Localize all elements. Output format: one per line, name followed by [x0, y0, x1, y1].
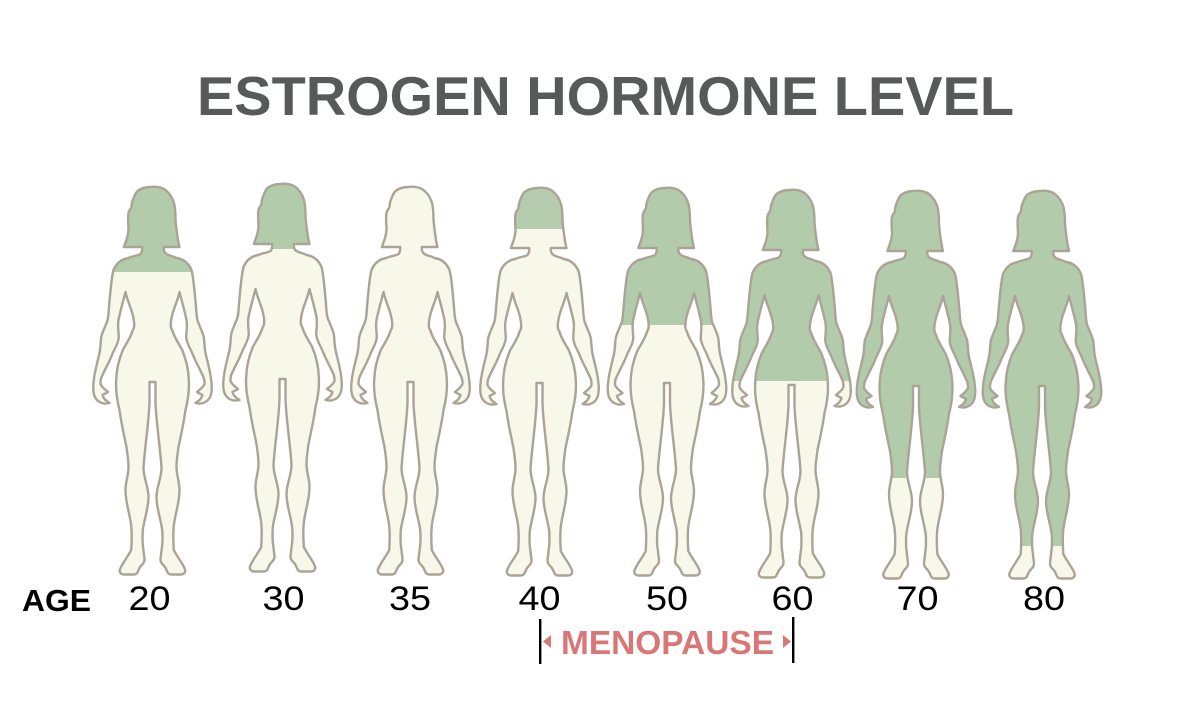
menopause bracket	[539, 617, 794, 664]
age labels: 35	[389, 580, 431, 618]
age axis label: AGE	[22, 583, 91, 618]
age labels: 30	[262, 580, 304, 618]
figure: age 35	[351, 187, 470, 574]
figure: age 20	[92, 186, 213, 576]
figure: age 50	[606, 186, 728, 577]
figure: age 70	[856, 190, 976, 580]
menopause label: MENOPAUSE	[561, 624, 774, 661]
figure: age 80	[982, 190, 1102, 580]
age labels: 20	[128, 580, 170, 618]
figure: age 40	[479, 186, 600, 577]
age labels: 40	[518, 580, 560, 618]
left arrow	[543, 635, 551, 648]
age labels: 50	[646, 580, 688, 618]
title: ESTROGEN HORMONE LEVEL	[197, 65, 1014, 127]
age labels: 70	[896, 580, 938, 618]
age labels: 60	[772, 580, 814, 618]
age labels	[128, 580, 1065, 618]
age labels: 80	[1023, 580, 1065, 618]
right arrow	[783, 635, 791, 648]
figure: age 30	[222, 182, 343, 573]
figure: age 60	[731, 188, 852, 579]
